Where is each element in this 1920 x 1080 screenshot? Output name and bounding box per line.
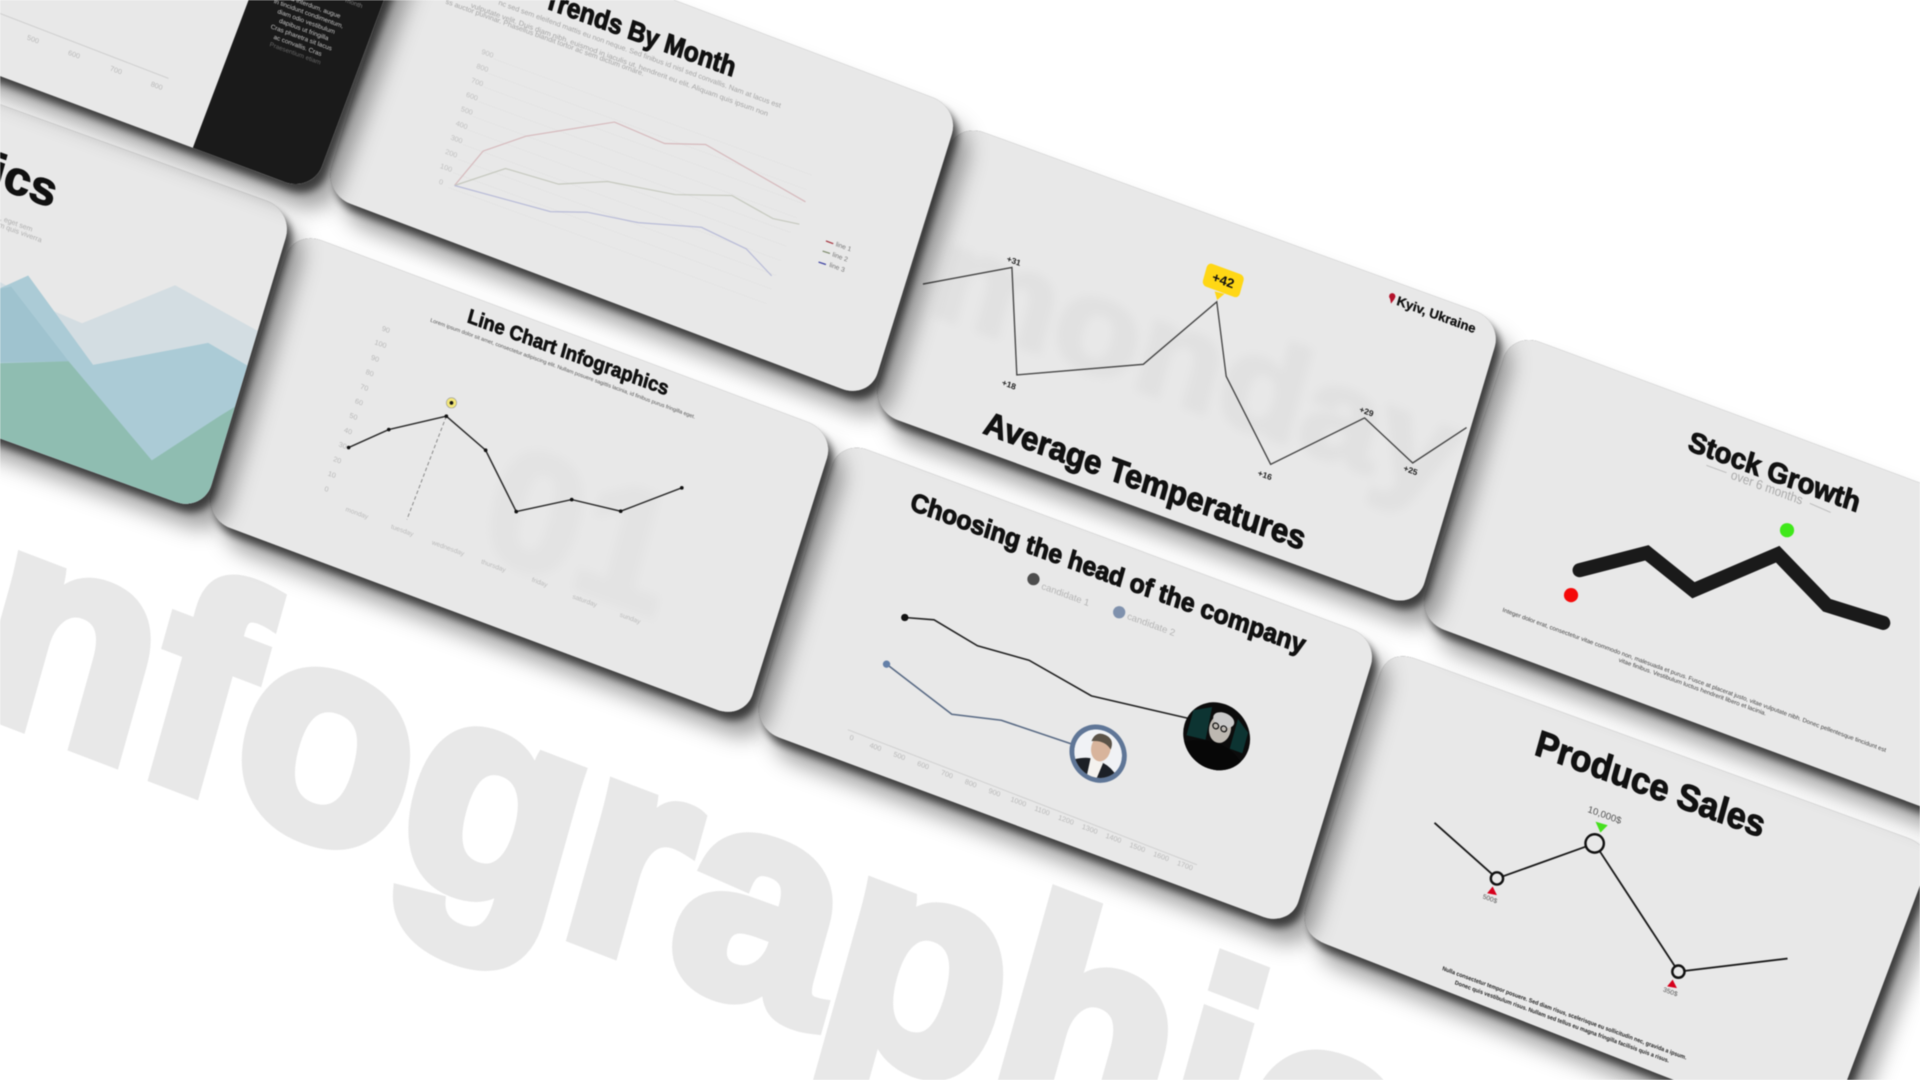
y axis labels: 30 xyxy=(338,440,348,451)
data labels: +29 xyxy=(1358,404,1375,419)
legend: line 1 xyxy=(835,241,852,254)
legend xyxy=(819,241,852,274)
y axis labels: 0 xyxy=(323,484,330,494)
thick line chart xyxy=(1580,553,1883,623)
axis: 400 xyxy=(869,740,882,753)
avatar: candidate 1 xyxy=(1182,701,1251,772)
subtitle: over 6 months xyxy=(1729,467,1805,508)
panel: average temperatures xyxy=(871,122,1502,609)
panel: stock growth xyxy=(1417,332,1920,819)
legend: candidate 1 xyxy=(1040,581,1091,609)
description: Integer dolor erat, consectetur vitae commodo non, malesuada et purus. Fusce at placerat justo, vitae vulputate nibh. Donec pellentesque tincidunt est xyxy=(1502,608,1887,754)
callout: peak temperature: +42 xyxy=(1211,269,1236,291)
high point dot xyxy=(1780,523,1794,537)
data labels: +18 xyxy=(1001,377,1017,392)
x axis labels: friday xyxy=(531,577,549,589)
y axis labels: 80 xyxy=(365,367,375,379)
axis: 0 xyxy=(849,733,855,743)
line chart xyxy=(923,267,1467,464)
axis: 600 xyxy=(67,48,81,61)
y axis labels: 100 xyxy=(374,337,388,350)
axis: 1300 xyxy=(1081,822,1099,836)
card xyxy=(323,0,960,399)
description: nc sed sem eleifend mattis eu non neque. Sed finibus id nisl sed convallis. Nam at lacus est xyxy=(498,0,782,110)
location label: Kyiv, Ukraine xyxy=(1395,293,1477,336)
data labels: +25 xyxy=(1402,463,1419,478)
x axis labels: wednesday xyxy=(430,539,465,558)
avatar: candidate 2 xyxy=(1068,724,1128,784)
y axis labels: 90 xyxy=(381,324,391,335)
panel: choosing the head of the company xyxy=(752,440,1379,927)
card xyxy=(752,440,1379,927)
side panel text xyxy=(269,0,364,67)
legend: line 2 xyxy=(832,252,849,264)
data labels: +16 xyxy=(1257,468,1273,482)
footnote: Donec quis vestibulum risus. Nullam sed tellus eu magna fringilla facilisis quis a risus. xyxy=(1454,980,1670,1065)
side panel text: Cras pharetra sit lacus xyxy=(270,23,333,52)
x axis labels: saturday xyxy=(572,593,598,609)
panel: line chart infographics xyxy=(203,230,835,720)
y axis labels: 20 xyxy=(332,454,342,466)
area chart xyxy=(0,275,258,504)
axis xyxy=(0,13,168,92)
series: line 1 xyxy=(455,122,805,202)
axis: 1700 xyxy=(1176,858,1194,872)
legend: candidate 2 xyxy=(1126,611,1176,639)
series: candidate 2 xyxy=(883,660,1072,744)
y axis labels: 300 xyxy=(450,133,464,145)
watermark: 01: 01 xyxy=(467,407,696,651)
series: line 3 xyxy=(455,186,772,276)
card xyxy=(0,15,294,512)
y axis labels: 600 xyxy=(465,90,479,103)
axis: 700 xyxy=(940,768,954,780)
watermark: monday: monday xyxy=(919,196,1476,529)
x axis labels xyxy=(345,506,642,626)
callout: peak temperature xyxy=(1202,262,1245,300)
x axis labels: sunday xyxy=(619,612,642,626)
x axis labels: thursday xyxy=(480,559,507,574)
axis: 1600 xyxy=(1152,849,1170,863)
data labels xyxy=(1001,254,1419,482)
panel: trends by month xyxy=(323,0,960,399)
low point dot xyxy=(1564,588,1578,602)
y axis labels: 40 xyxy=(343,425,353,437)
axis: 900 xyxy=(988,786,1001,799)
y axis labels: 50 xyxy=(348,411,359,422)
y axis labels: 900 xyxy=(481,47,495,60)
marker: low value 500 xyxy=(1482,887,1498,905)
legend xyxy=(1027,573,1176,639)
card xyxy=(1305,656,1920,1080)
axis: 700 xyxy=(109,64,123,76)
y axis labels: 60 xyxy=(354,396,364,408)
footnote: Nulla consectetur tempor posuere. Sed diam risus, scelerisque eu sollicitudin nec, gravida a ipsum. xyxy=(1441,966,1687,1062)
data labels: +31 xyxy=(1006,254,1022,268)
card xyxy=(0,0,420,192)
description: vitae finibus. Vestibulum luctus hendrerit libero et lacinia. xyxy=(1618,658,1767,718)
card xyxy=(203,230,835,720)
marker: low value 350 xyxy=(1662,980,1678,998)
y axis labels: 100 xyxy=(439,161,453,174)
subtitle xyxy=(1706,465,1831,512)
y axis labels: 0 xyxy=(438,177,444,187)
panel: produce sales xyxy=(1305,656,1920,1080)
y axis labels: 800 xyxy=(476,61,489,74)
axis: 1100 xyxy=(1034,804,1051,818)
dashed guide xyxy=(407,416,446,520)
title: Stock Growth xyxy=(1685,426,1864,519)
panel: black sidebar slide xyxy=(0,0,420,192)
legend: line 3 xyxy=(828,262,846,274)
axis: 500 xyxy=(892,750,906,762)
series: line 2 xyxy=(455,168,799,224)
dark side panel xyxy=(192,0,384,185)
highlight marker xyxy=(446,398,457,408)
x axis labels: monday xyxy=(345,506,370,521)
y axis labels xyxy=(323,324,391,494)
y axis labels: 400 xyxy=(455,119,469,131)
y axis labels: 200 xyxy=(444,147,458,160)
axis: 800 xyxy=(964,777,978,790)
x axis labels: tuesday xyxy=(390,524,415,539)
y axis labels: 700 xyxy=(470,76,484,88)
axis: 600 xyxy=(916,759,930,771)
axis: 500 xyxy=(26,33,40,46)
series: candidate 1 xyxy=(901,614,1189,719)
card xyxy=(1417,332,1920,819)
axis: 1500 xyxy=(1129,840,1146,854)
panel: area chart xyxy=(0,104,314,541)
y axis labels: 10 xyxy=(327,469,337,480)
axis xyxy=(848,730,1197,872)
title: Average Temperatures xyxy=(980,405,1310,558)
y axis labels: 70 xyxy=(359,382,369,393)
grid lines xyxy=(448,59,812,304)
subtitle: Lorem ipsum dolor sit amet, consectetur adipiscing elit. Nullam posuere sagittis lacinia, id finibus purus fringilla eget. xyxy=(429,318,696,421)
title: Choosing the head of the company xyxy=(907,487,1309,660)
side panel text: Praesentium etiam xyxy=(269,41,321,67)
y axis labels xyxy=(438,47,495,187)
side panel text: diam odio vestibulum xyxy=(277,8,336,36)
axis: 800 xyxy=(150,79,164,92)
title: Produce Sales xyxy=(1531,722,1770,845)
side panel text: ac convallis. Cras xyxy=(273,34,322,58)
y axis labels: 90 xyxy=(370,353,380,364)
marker: high value: 10,000$ xyxy=(1586,804,1623,827)
axis: 1000 xyxy=(1010,794,1027,809)
line chart xyxy=(1434,823,1788,978)
marker: low value 350: 350$ xyxy=(1662,987,1678,998)
y axis labels: 500 xyxy=(460,104,474,117)
card xyxy=(871,122,1502,609)
marker: low value 500: 500$ xyxy=(1482,893,1498,905)
line chart xyxy=(347,414,684,513)
side panel text: dapibus ut fringilla xyxy=(278,18,330,42)
axis: 1200 xyxy=(1057,813,1075,827)
axis: 1400 xyxy=(1105,831,1122,845)
description: vulputate velit. Duis diam nibh, euismod in iaculis ut, hendrerit eu elit. Aliquam quis ipsum non xyxy=(470,1,769,118)
title: Line Chart Infographics xyxy=(465,305,671,400)
